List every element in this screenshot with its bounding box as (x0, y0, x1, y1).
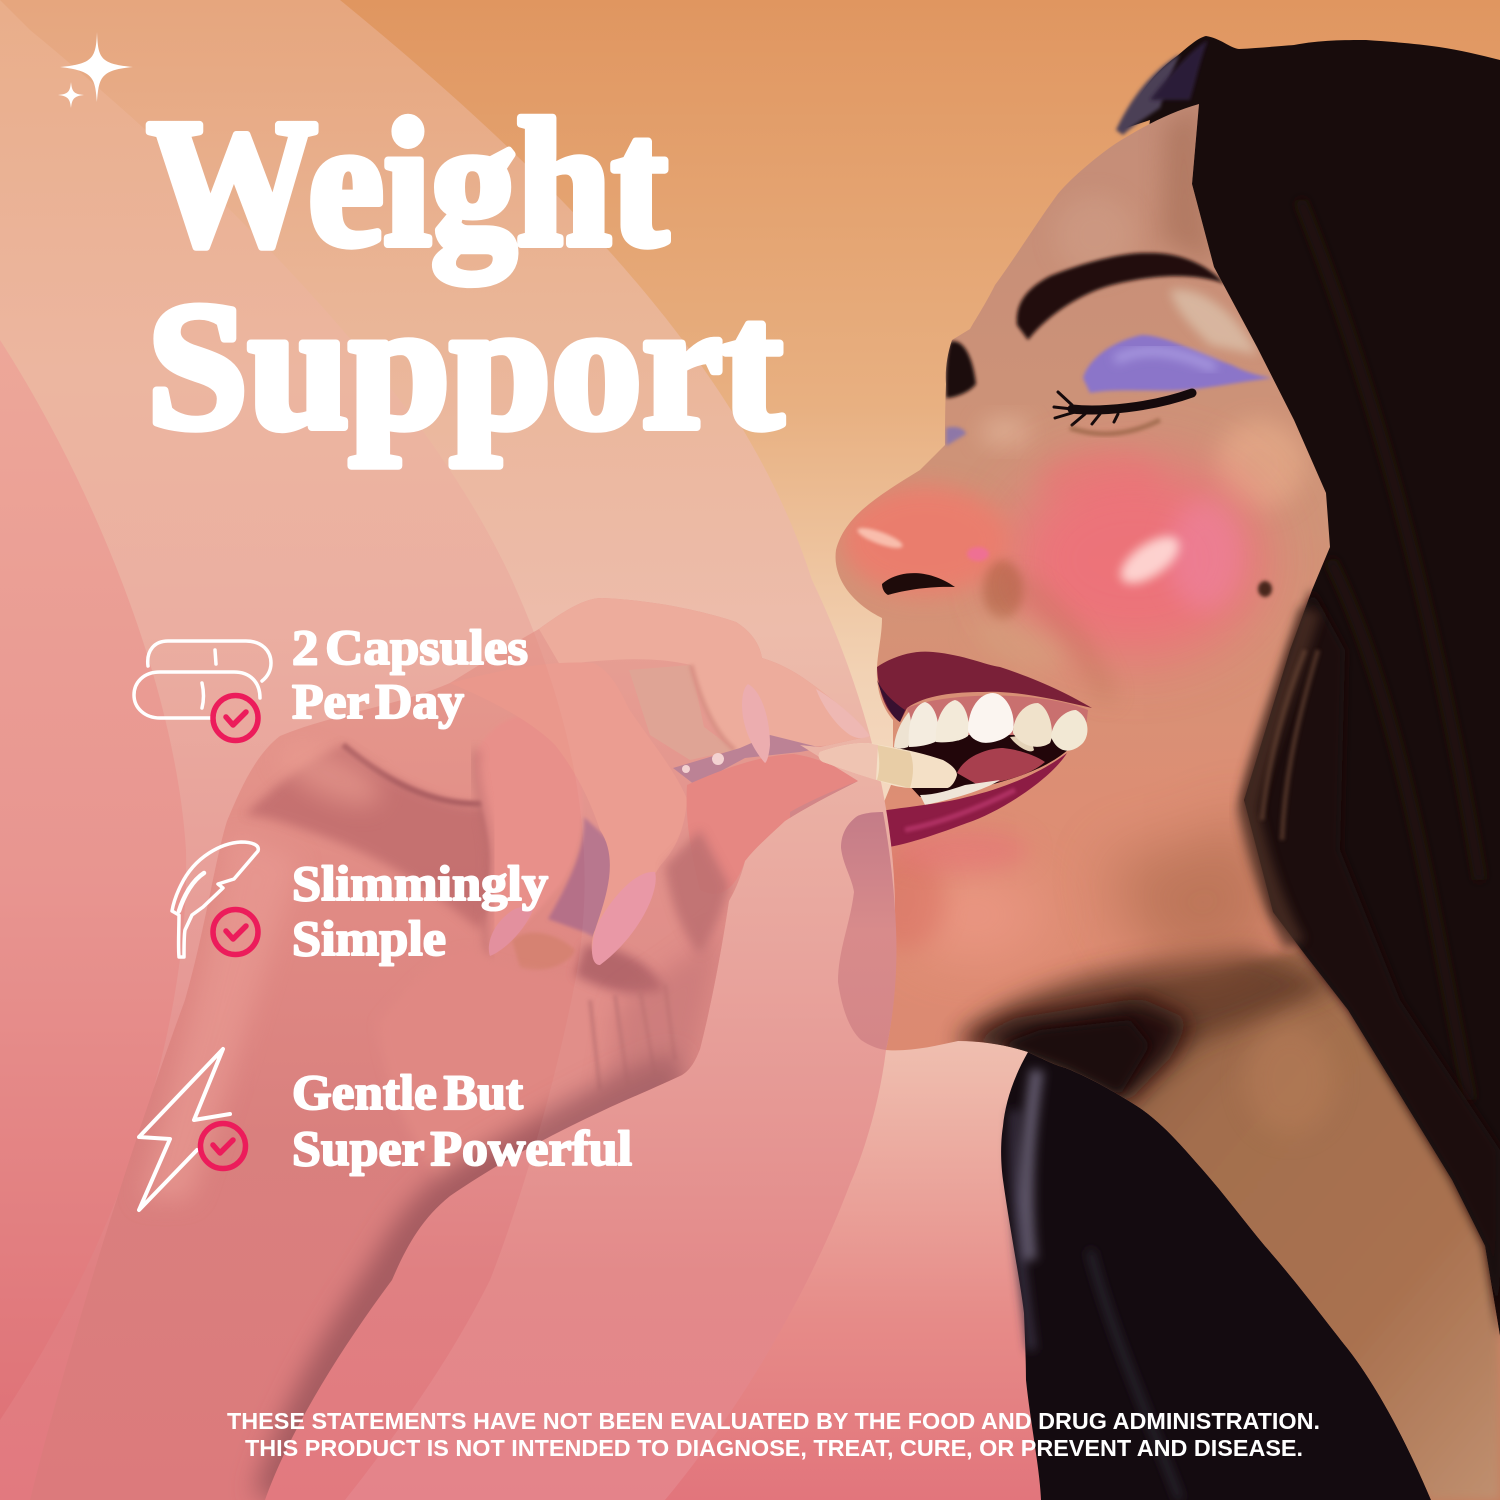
neck shading (1028, 950, 1500, 1500)
fold crease (343, 745, 490, 804)
title (147, 83, 783, 467)
benefit text (292, 619, 528, 729)
capsule (819, 743, 957, 788)
benefit text: Super Powerful (292, 1120, 632, 1176)
wrist shadow (275, 1075, 682, 1500)
nail: index (816, 689, 870, 738)
hair back (1100, 36, 1500, 1345)
lower face lighter patch (936, 881, 1029, 954)
nose shading (840, 485, 1010, 595)
knuckle back highlight (292, 750, 381, 810)
translucent wave: large (0, 0, 896, 1500)
ring finger (480, 797, 510, 928)
FDA disclaimer: THIS PRODUCT IS NOT INTENDED TO DIAGNOSE, TREAT, CURE, OR PREVENT AND DISEASE. (245, 1435, 1303, 1461)
under-jaw dark wedge (955, 998, 1190, 1105)
palm shadow (575, 945, 665, 994)
benefit text: Per Day (292, 673, 464, 729)
under-eye crease (1070, 420, 1160, 434)
palm creases (590, 985, 675, 1090)
lower lip (880, 753, 1067, 848)
hair shadow over cheek and jaw (1244, 590, 1500, 1336)
palm (378, 901, 729, 1196)
hair strands by cheek (1262, 650, 1318, 840)
thumb (687, 754, 858, 894)
index finger inner shade (691, 665, 735, 750)
ring finger shadow (476, 750, 490, 955)
icon: check badge (200, 1124, 246, 1168)
far eye (946, 341, 976, 398)
hair lower highlights (1014, 1070, 1180, 1500)
neck warm patch (1256, 1034, 1324, 1123)
eyebrow (1017, 253, 1225, 340)
FDA disclaimer: THESE STATEMENTS HAVE NOT BEEN EVALUATED BY THE FOOD AND DRUG ADMINISTRATION. (227, 1408, 1320, 1434)
chin silhouette under overlay (838, 812, 896, 1050)
translucent wave: left (0, 340, 186, 1420)
FDA disclaimer (227, 1408, 1320, 1461)
icon: capsules (134, 641, 271, 718)
nose-bridge highlight (980, 417, 1030, 447)
under-jaw dark core (1000, 1020, 1150, 1095)
thumb underside nail (790, 781, 858, 820)
soft brown hair band (1248, 610, 1310, 945)
glitter brow bone (1170, 289, 1258, 355)
benefit text (292, 1064, 632, 1176)
purple gap (548, 817, 620, 940)
benefit text: Slimmingly (292, 855, 548, 911)
palm right shade (602, 930, 725, 1111)
woman portrait (836, 36, 1500, 1500)
gums (907, 696, 1088, 735)
benefit text: Gentle But (292, 1064, 523, 1120)
hand silhouette (30, 598, 870, 1500)
benefit text (292, 855, 548, 966)
face and neck (836, 104, 1500, 1500)
nail: pinky (489, 907, 533, 956)
upper lip (877, 652, 1092, 722)
index finger (539, 598, 870, 753)
title: Weight (147, 83, 668, 284)
translucent wave: middle (0, 0, 585, 1500)
smile fold (1028, 586, 1104, 686)
sparkles (58, 32, 133, 108)
hair lower (1001, 1040, 1480, 1500)
mouth interior (896, 735, 1067, 797)
middle finger (450, 662, 687, 961)
nostril (882, 573, 955, 595)
title: Support (147, 266, 783, 467)
side jaw shading (1110, 810, 1285, 980)
fold shadow area (245, 745, 502, 930)
cheek blush (1005, 460, 1265, 660)
icon: check badge (213, 910, 258, 954)
hand holding capsule (110, 598, 870, 1500)
benefit: 2 capsules per day (134, 619, 528, 740)
eye lashes (1054, 392, 1192, 425)
forehead and brow shading (1160, 104, 1214, 267)
upper teeth (894, 693, 1087, 751)
folded fingertip (512, 933, 575, 970)
benefit text: 2 Capsules (292, 619, 528, 675)
benefit text: Simple (292, 910, 446, 966)
nail: middle (742, 684, 770, 763)
lower teeth (920, 780, 1000, 805)
under-eye pink (1058, 462, 1088, 478)
wave edge tint over hand (490, 580, 900, 1280)
icon: check badge (213, 696, 258, 740)
jaw soft shadow (960, 950, 1340, 1090)
upper lip skin (988, 614, 1061, 666)
arm light band (145, 858, 282, 1200)
tongue (957, 748, 1045, 785)
icon: feather (172, 842, 258, 957)
benefit: slimmingly simple (172, 842, 548, 966)
mole (1258, 581, 1272, 597)
capsule part under overlay (819, 743, 878, 780)
purple eyeshadow (1083, 335, 1272, 393)
icon: lightning bolt (139, 1049, 230, 1210)
thumb base shadow (665, 830, 729, 955)
cheek highlight (1115, 530, 1185, 590)
purple capsule behind (673, 735, 822, 785)
gap behind fingers (629, 665, 735, 760)
benefit: gentle but super powerful (139, 1049, 632, 1210)
nail: ring (592, 872, 656, 965)
cheek tan side (1215, 420, 1305, 510)
